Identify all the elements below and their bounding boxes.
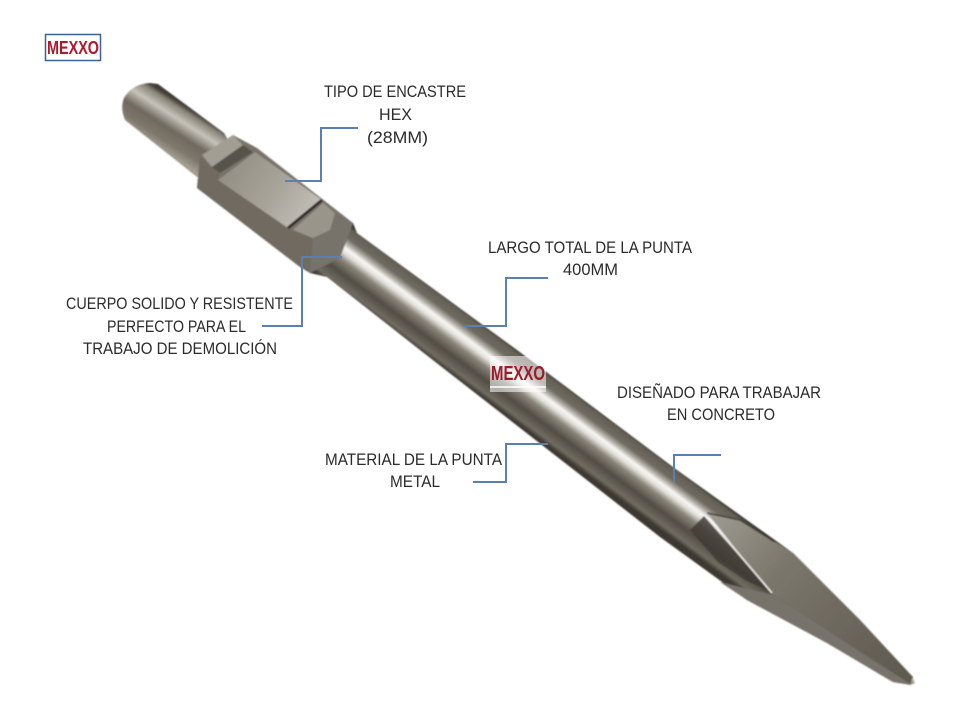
illustration: demolition point chisel xyxy=(122,83,915,685)
callout: material xyxy=(325,444,548,491)
tip lower facet xyxy=(720,582,908,684)
shank xyxy=(122,83,240,177)
collar body xyxy=(197,135,353,273)
collar top tab xyxy=(202,135,243,167)
tip flat face xyxy=(707,513,913,684)
callout: tipo de encastre: HEX xyxy=(379,105,412,124)
collar upper notch xyxy=(212,145,253,173)
logo: Mexxo top left: MEXXO xyxy=(47,38,99,58)
callout: largo total xyxy=(464,238,693,326)
collar flat face xyxy=(218,152,322,228)
tip dark recess xyxy=(690,516,772,593)
tip highlight line xyxy=(710,520,772,593)
callout: tipo de encastre: (28MM) xyxy=(367,128,428,147)
tip upper dark edge xyxy=(707,513,775,542)
callout: largo total: LARGO TOTAL DE LA PUNTA xyxy=(488,238,693,257)
callout: cuerpo solido: PERFECTO PARA EL xyxy=(107,317,246,336)
callout: cuerpo solido: TRABAJO DE DEMOLICIÓN xyxy=(83,339,277,358)
logo: Mexxo top left xyxy=(46,34,100,60)
callout: material: MATERIAL DE LA PUNTA xyxy=(325,450,503,469)
callout: tipo de encastre xyxy=(285,82,466,181)
callout: disenado para concreto: DISEÑADO PARA TRABAJAR xyxy=(617,383,821,402)
callout: cuerpo solido: CUERPO SOLIDO Y RESISTENTE xyxy=(66,294,293,313)
callout: largo total: 400MM xyxy=(563,260,618,279)
shaft and tip body xyxy=(300,213,915,685)
collar lower notch xyxy=(288,200,322,228)
callout: disenado para concreto: EN CONCRETO xyxy=(667,405,775,424)
callout: cuerpo solido xyxy=(66,257,342,358)
watermark: Mexxo logo on shaft xyxy=(490,356,546,392)
collar side xyxy=(197,157,313,273)
watermark: Mexxo logo on shaft: MEXXO xyxy=(491,363,545,385)
callout: tipo de encastre: TIPO DE ENCASTRE xyxy=(324,82,466,101)
callout: disenado para concreto xyxy=(617,383,821,482)
collar lower tab xyxy=(293,203,335,238)
callout: material: METAL xyxy=(390,472,440,491)
